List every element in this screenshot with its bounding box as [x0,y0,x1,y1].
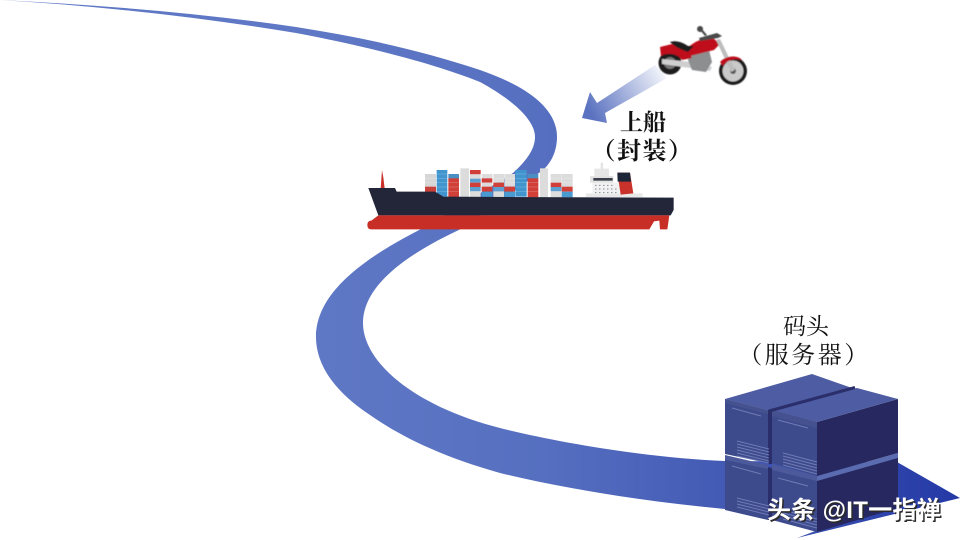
label: 上船（封装）: 上船 [620,110,666,135]
server stack [725,374,898,532]
front fork [716,39,735,72]
watermark: 头条 @IT一指禅 [767,497,941,524]
ship waterline [367,215,669,229]
label: 码头（服务器）: （服务器） [738,342,871,369]
label: 上船（封装） [592,110,694,165]
containers [425,168,573,197]
rear fender [660,44,692,60]
ship superstructure [586,163,643,197]
front fender [720,56,742,66]
handlebar and mirror [697,26,722,41]
server vents [732,408,817,528]
container ship [367,163,674,229]
label: 上船（封装）: （封装） [592,138,694,165]
engine [688,46,712,72]
lower servers [725,453,898,532]
rear wheel [658,52,682,74]
ship mast [381,170,385,188]
icon: motorcycle [658,26,747,85]
front wheel [719,57,747,85]
label: 码头（服务器）: 码头 [783,314,830,339]
label: 码头（服务器） [738,314,871,369]
exhaust [662,59,712,71]
tank [686,38,720,56]
arrow: motorcycle to ship [582,65,667,123]
ship hull [368,188,674,215]
upper servers [725,374,898,476]
seat [670,41,694,52]
watermark: 头条 @IT一指禅 [768,498,943,526]
